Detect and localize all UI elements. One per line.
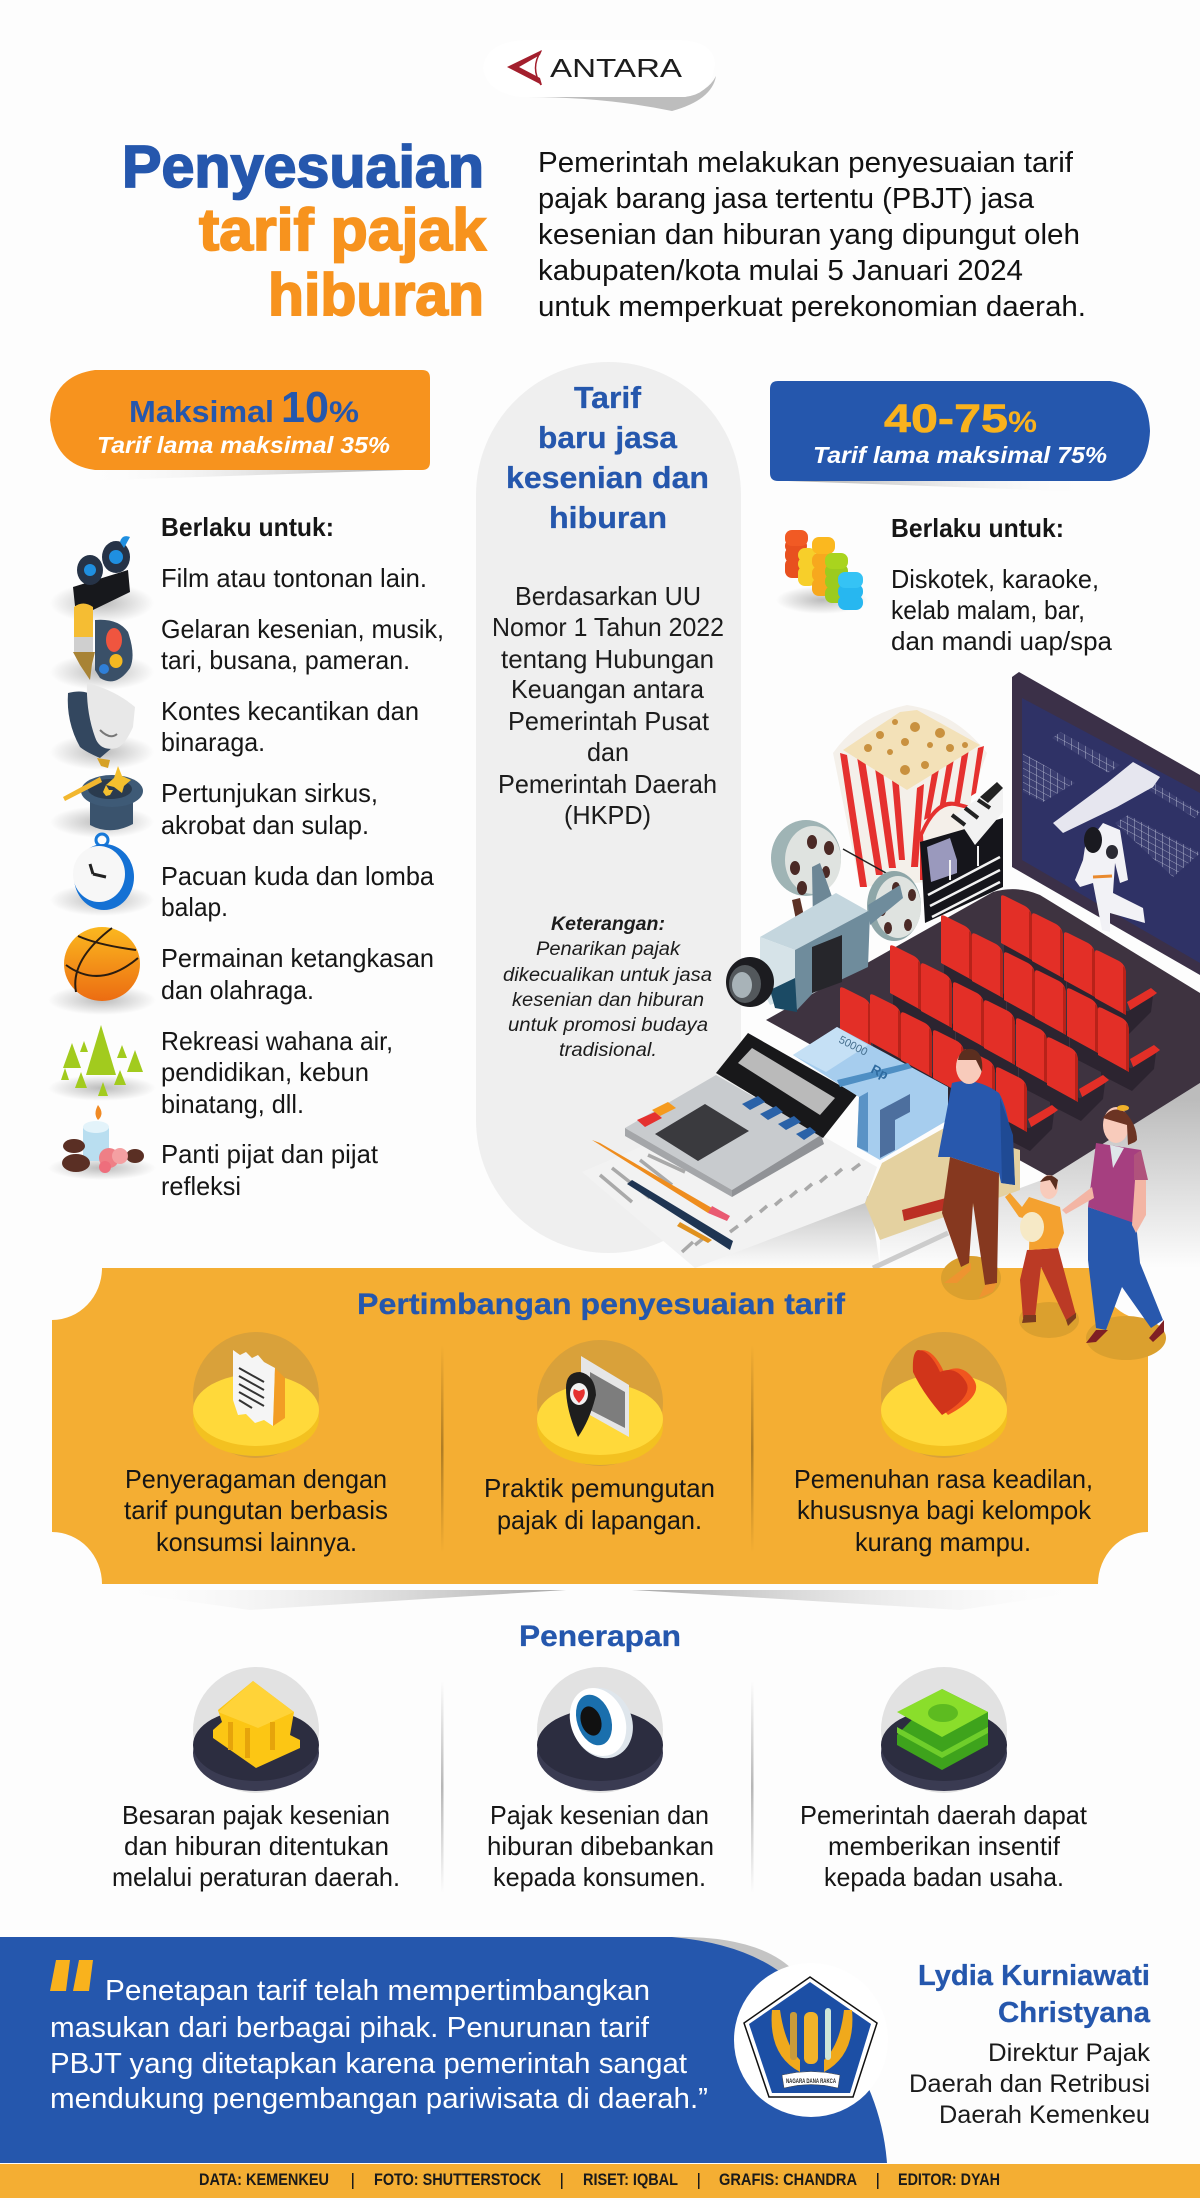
column 2 text: Praktik pemungutan [484,1473,715,1503]
icon: basketball [48,927,156,1015]
speaker role: Daerah dan Retribusi [909,2070,1150,2098]
quote text: mendukung pengembangan pariwisata di daerah.” [50,2083,708,2115]
child [1005,1175,1076,1326]
column 1 text: tarif pungutan berbasis [124,1495,388,1525]
left list text: Berlaku untuk: [161,512,334,542]
column 2 text: kepada konsumen. [493,1862,706,1892]
movie ticket [865,1127,1020,1240]
column 2 text: pajak di lapangan. [497,1505,702,1535]
center legal basis text: tentang Hubungan [501,644,714,674]
orange rate pill [50,370,430,481]
panel: penerapan [112,1667,1088,1893]
icon: money stack [881,1667,1007,1793]
blue rate pill: % [1008,406,1037,439]
popcorn bucket [833,705,987,887]
column 2 text: hiburan dibebankan [487,1831,714,1861]
title: Penyesuaian [122,134,484,200]
right list text: dan mandi uap/spa [891,626,1113,656]
column 3 text: Pemerintah daerah dapat [800,1800,1088,1830]
film projector [726,820,921,1012]
column 1 text: Besaran pajak kesenian [122,1800,390,1830]
quote mark [50,1960,93,1991]
column 2 text: Pajak kesenian dan [490,1800,709,1830]
center heading: kesenian dan [506,460,709,495]
right list text [891,513,1113,656]
center note [503,913,712,1061]
heading: Pertimbangan penyesuaian tarif [357,1288,846,1321]
orange rate pill: 10 [281,383,329,432]
center heading: hiburan [549,500,667,535]
column dividers [441,1345,754,1553]
illustration: cinema scene [582,672,1200,1268]
left list text [161,512,444,1201]
cinema seats [840,895,1160,1151]
icon: map pin on yellow disc [537,1340,663,1466]
orange rate pill: Maksimal [129,394,274,429]
column 1 text [124,1464,388,1557]
icon: palette and brush [50,604,154,690]
column 3 text: khususnya bagi kelompok [797,1495,1092,1525]
left list text: Kontes kecantikan dan [161,696,419,726]
receipt paper [582,1135,877,1268]
column 1 text: melalui peraturan daerah. [112,1862,400,1892]
left list text: akrobat dan sulap. [161,810,369,840]
emblem: Kemenkeu: NAGARA DANA RAKCA [786,2079,836,2085]
left list text: pendidikan, kebun [161,1057,369,1087]
center note: kesenian dan hiburan [512,989,704,1011]
center note: tradisional. [559,1039,657,1061]
white circle behind emblem [734,1963,888,2117]
title [122,134,486,328]
icon: stopwatch [50,834,154,916]
center note: Keterangan: [551,913,665,935]
center legal basis text: Keuangan antara [511,674,705,704]
panel: pertimbangan penyesuaian tarif [52,1268,1148,1584]
family ground shadows [941,1256,1166,1360]
theater floor [766,889,1200,1177]
footer credits bar: GRAFIS: CHANDRA [719,2171,857,2189]
left list text: tari, busana, pameran. [161,645,410,675]
column 2 text [484,1473,715,1535]
column 1 text [112,1800,400,1892]
icon: theatre masks [50,683,154,770]
icon: magic hat [50,766,154,838]
left list text: Film atau tontonan lain. [161,563,427,593]
logo: ANTARA: ANTARA [550,53,683,83]
money stacks [793,1027,948,1160]
footer credits bar: RISET: IQBAL [583,2171,678,2189]
paper floor streak [873,1233,948,1268]
column 3 text [794,1464,1093,1557]
speaker name: Lydia Kurniawati [918,1960,1150,1992]
center note: dikecualikan untuk jasa [503,964,712,986]
left list text: Rekreasi wahana air, [161,1026,393,1056]
icon: receipt on yellow disc [193,1332,319,1458]
center legal basis text [492,581,724,830]
cinema screen [1012,672,1200,975]
paper shadow [695,1195,880,1268]
center legal basis text: Nomor 1 Tahun 2022 [492,612,724,642]
intro text: kesenian dan hiburan yang dipungut oleh [538,219,1080,251]
icon: candle and stones [48,1105,156,1180]
intro text: kabupaten/kota mulai 5 Januari 2024 [538,255,1023,287]
quote text: Penetapan tarif telah mempertimbangkan [105,1975,650,2007]
logo: ANTARA [483,40,716,111]
calculator [625,1033,857,1197]
quote text: PBJT yang ditetapkan karena pemerintah sangat [50,2048,687,2080]
column 1 text: konsumsi lainnya. [156,1527,357,1557]
speaker role [909,2039,1151,2129]
right list text: Berlaku untuk: [891,513,1064,543]
column 3 text: memberikan insentif [828,1831,1061,1861]
icon: heart on yellow disc [881,1332,1007,1458]
left list text: dan olahraga. [161,975,314,1005]
orange rate pill: Tarif lama maksimal 35% [97,432,390,458]
intro text: pajak barang jasa tertentu (PBJT) jasa [538,183,1034,215]
speaker name: Christyana [998,1997,1151,2029]
right list text: Diskotek, karaoke, [891,564,1099,594]
speaker role: Daerah Kemenkeu [939,2101,1150,2129]
intro text [538,147,1086,323]
quote text: masukan dari berbagai pihak. Penurunan tarif [50,2012,649,2044]
column 2 text [487,1800,714,1892]
money stacks: 50000 [837,1034,869,1059]
pencil and pen [592,1140,733,1250]
clapperboard [920,782,1003,923]
left list text: Gelaran kesenian, musik, [161,614,444,644]
center legal basis text: Pemerintah Daerah [498,769,717,799]
floor shadow [880,1083,1200,1268]
column 3 text: Pemenuhan rasa keadilan, [794,1464,1093,1494]
left list text: balap. [161,892,228,922]
center legal basis text: Pemerintah Pusat [508,706,710,736]
center legal basis text: dan [587,737,629,767]
money stacks: Rp [869,1061,891,1083]
blue rate pill: 40-75 [884,397,1008,441]
icon: film projector [50,536,154,623]
icon: equalizer blocks [776,530,868,614]
center heading: Tarif [574,380,642,415]
center heading [506,380,709,535]
right list text: kelab malam, bar, [891,595,1085,625]
left list text: Pertunjukan sirkus, [161,778,378,808]
panel shadow [107,1590,1094,1610]
title: hiburan [268,262,484,328]
footer credits bar: EDITOR: DYAH [898,2171,1000,2189]
man [938,1049,1015,1298]
blue rate pill: Tarif lama maksimal 75% [813,442,1107,468]
speaker name [918,1960,1151,2029]
center note: untuk promosi budaya [508,1014,708,1036]
column 1 text: dan hiburan ditentukan [124,1831,389,1861]
center legal basis text: Berdasarkan UU [515,581,701,611]
section heading: penerapan: Penerapan [519,1620,681,1653]
column 3 text [800,1800,1088,1892]
icon: trees [48,1025,156,1101]
intro text: Pemerintah melakukan penyesuaian tarif [538,147,1073,179]
center legal basis text: (HKPD) [564,800,651,830]
center note: Penarikan pajak [536,938,681,960]
left list text: Pacuan kuda dan lomba [161,861,435,891]
left list text: Permainan ketangkasan [161,943,434,973]
blue rate pill [770,381,1150,492]
left list text: refleksi [161,1171,241,1201]
left list text: Panti pijat dan pijat [161,1139,379,1169]
quote text [50,1975,708,2115]
speaker role: Direktur Pajak [988,2039,1151,2067]
icon: government building [193,1667,319,1793]
left list text: binatang, dll. [161,1089,304,1119]
woman [1062,1105,1164,1343]
center heading: baru jasa [538,420,678,455]
footer credits bar: FOTO: SHUTTERSTOCK [374,2171,541,2189]
column dividers [441,1681,754,1893]
intro text: untuk memperkuat perekonomian daerah. [538,291,1086,323]
panel: tarif center capsule [476,362,741,1253]
footer credits bar: DATA: KEMENKEU [199,2171,329,2189]
left list text: binaraga. [161,727,265,757]
emblem: Kemenkeu [744,1977,877,2097]
icon: eye [537,1667,663,1793]
title: tarif pajak [199,197,486,263]
column 3 text: kurang mampu. [855,1527,1031,1557]
column 3 text: kepada badan usaha. [824,1862,1064,1892]
family [938,1049,1166,1360]
footer credits bar [0,2164,1200,2198]
column 1 text: Penyeragaman dengan [125,1464,387,1494]
orange rate pill: % [329,396,359,429]
panel: quote [0,1937,888,2163]
